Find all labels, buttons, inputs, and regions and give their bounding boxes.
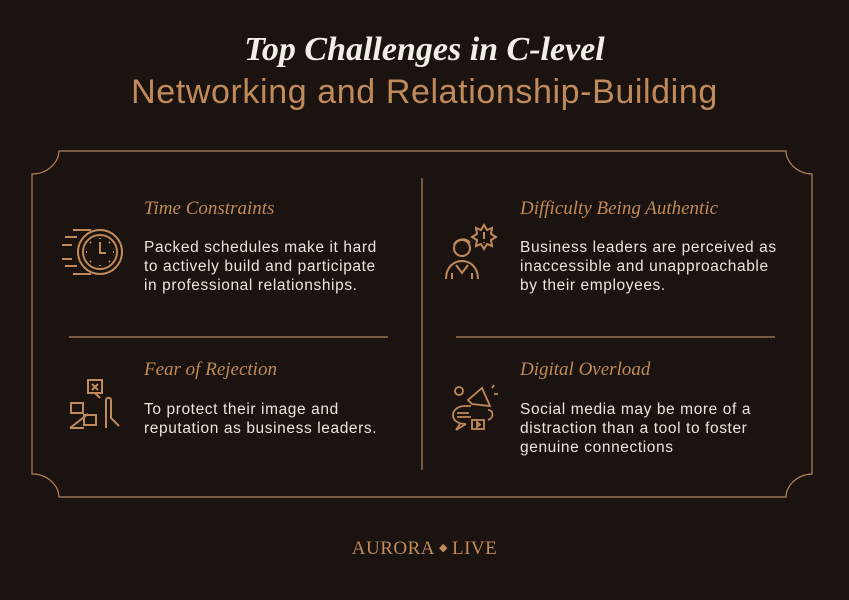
title: Top Challenges in C-level — [244, 31, 605, 68]
icon: person alert — [445, 223, 498, 279]
heading: time constraints: Time Constraints — [144, 198, 274, 219]
icon: clock — [62, 229, 123, 275]
icon: megaphone — [452, 384, 498, 431]
heading: digital overload: Digital Overload — [520, 359, 650, 380]
body: time constraints: in professional relationships. — [144, 277, 358, 294]
body: authentic: inaccessible and unapproachable — [520, 258, 769, 275]
body: authentic: Business leaders are perceived as — [520, 239, 777, 256]
body: rejection — [144, 401, 377, 437]
body: digital overload — [520, 401, 751, 456]
body: digital overload: genuine connections — [520, 439, 674, 456]
body: time constraints — [144, 239, 377, 294]
panel: time constraints — [62, 198, 377, 294]
heading: authentic: Difficulty Being Authentic — [520, 198, 718, 219]
body: time constraints: Packed schedules make it hard — [144, 239, 377, 256]
body: rejection: reputation as business leaders. — [144, 420, 377, 437]
body: authentic: by their employees. — [520, 277, 666, 294]
subtitle: Networking and Relationship-Building — [131, 73, 718, 111]
body: rejection: To protect their image and — [144, 401, 339, 418]
icon: rejection hand — [70, 379, 120, 429]
heading: rejection: Fear of Rejection — [144, 359, 277, 380]
logo: AURORA ◆LIVE — [352, 538, 497, 559]
panel: rejection — [70, 359, 377, 437]
body: digital overload: distraction than a tool to foster — [520, 420, 747, 437]
body: digital overload: Social media may be more of a — [520, 401, 751, 418]
panel: authentic — [445, 198, 777, 294]
body: authentic — [520, 239, 777, 294]
body: time constraints: to actively build and participate — [144, 258, 376, 275]
panel: digital overload — [452, 359, 751, 456]
